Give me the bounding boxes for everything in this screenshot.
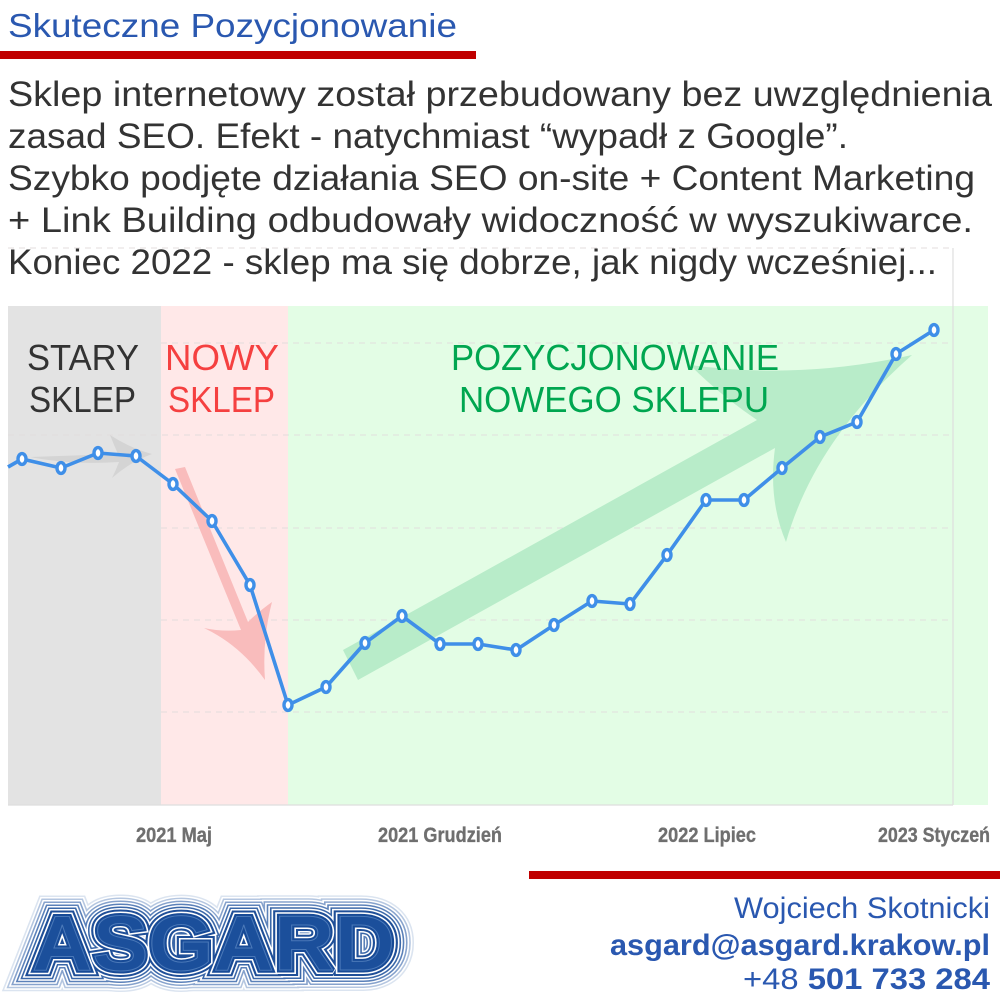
arrow: growth — [343, 355, 912, 680]
x axis labels — [136, 824, 990, 847]
title underline — [0, 51, 476, 59]
logo: asgard: ASGARD — [32, 899, 395, 987]
contact details: Wojciech Skotnicki — [734, 892, 990, 925]
label: nowy sklep: SKLEP — [168, 379, 275, 420]
contact details: +48 501 733 284 — [743, 963, 990, 996]
chart — [8, 248, 988, 805]
logo: asgard: ASGARD — [32, 899, 395, 987]
label: stary sklep: STARY — [27, 337, 139, 378]
label: stary sklep: SKLEP — [29, 379, 136, 420]
logo: asgard: ASGARD — [32, 899, 395, 987]
label: stary sklep — [27, 337, 139, 420]
x axis labels: 2022 Lipiec — [658, 824, 756, 847]
label: pozycjonowanie nowego sklepu: POZYCJONOWANIE — [451, 337, 779, 378]
contact details: asgard@asgard.krakow.pl — [610, 929, 990, 962]
contact divider — [529, 871, 1000, 879]
arrow: decline — [175, 467, 272, 680]
logo: asgard: ASGARD — [32, 899, 395, 987]
intro text block — [8, 75, 993, 282]
title: Skuteczne Pozycjonowanie — [8, 7, 457, 44]
intro text block: Koniec 2022 - sklep ma się dobrze, jak nigdy wcześniej... — [8, 243, 937, 282]
logo: asgard: ASGARD — [32, 899, 395, 987]
intro text block: Szybko podjęte działania SEO on-site + Content Marketing — [8, 159, 975, 198]
label: pozycjonowanie nowego sklepu: NOWEGO SKLEPU — [459, 379, 769, 420]
logo: asgard: ASGARD — [32, 899, 395, 987]
logo: asgard: ASGARD — [32, 899, 395, 987]
intro text block: + Link Building odbudowały widoczność w wyszukiwarce. — [8, 201, 973, 240]
x axis labels: 2021 Grudzień — [378, 824, 502, 847]
logo: asgard: ASGARD — [32, 899, 395, 987]
label: pozycjonowanie nowego sklepu — [451, 337, 779, 420]
intro text block: Sklep internetowy został przebudowany bez uwzględnienia — [8, 75, 993, 114]
logo: asgard: ASGARD — [32, 899, 395, 987]
intro text block: zasad SEO. Efekt - natychmiast “wypadł z Google”. — [8, 117, 848, 156]
logo: asgard: ASGARD — [32, 899, 395, 987]
label: nowy sklep — [165, 337, 279, 420]
label: nowy sklep: NOWY — [165, 337, 279, 378]
logo: asgard: ASGARD — [32, 899, 395, 987]
logo: asgard: ASGARD — [32, 899, 395, 987]
arrow: flat trend — [30, 435, 152, 478]
logo: asgard: ASGARD — [32, 899, 395, 987]
x axis labels: 2021 Maj — [136, 824, 212, 847]
logo: asgard: ASGARD — [32, 899, 395, 987]
line series — [8, 325, 938, 710]
contact details — [610, 892, 990, 996]
